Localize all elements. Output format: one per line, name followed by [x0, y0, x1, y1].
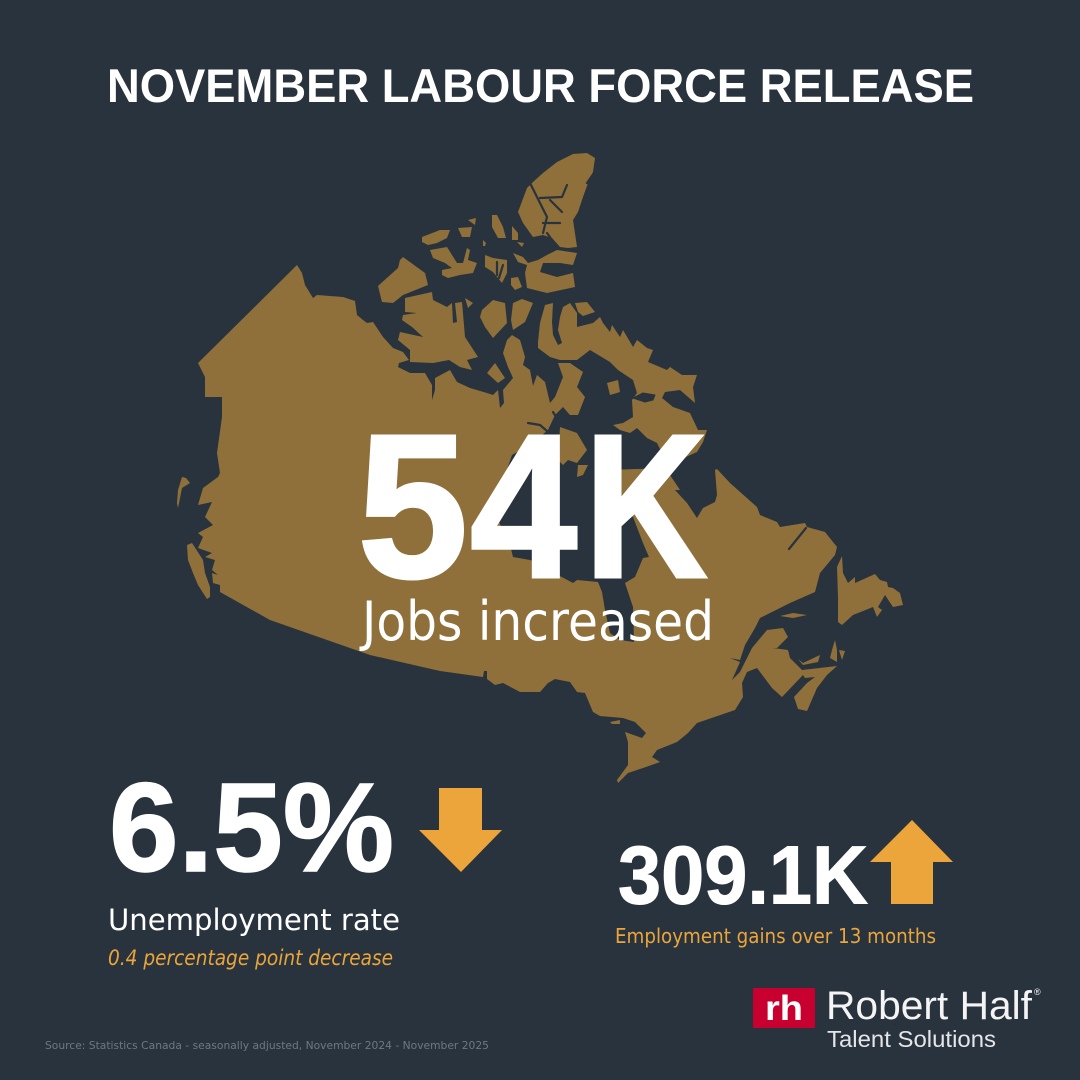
Devon Island — [513, 250, 577, 293]
big number: jobs increased: K — [584, 391, 707, 621]
Anticosti and Maritime islands — [605, 451, 845, 724]
water details — [497, 173, 806, 549]
Southampton Island — [558, 427, 587, 465]
logo registered mark: ® — [1034, 987, 1041, 997]
mainland — [198, 265, 837, 783]
stat: unemployment rate — [108, 757, 502, 971]
label: employment gains: Employment gains over 13 months — [615, 924, 936, 948]
logo rh letters: rh — [765, 989, 803, 1028]
Coats Island — [577, 465, 588, 477]
big number: jobs increased: 5 — [358, 391, 468, 621]
Baffin Island — [538, 303, 707, 465]
big number: jobs increased — [358, 391, 707, 621]
logo red box — [753, 988, 815, 1028]
stat: employment gains — [615, 820, 953, 948]
label: unemployment rate: Unemployment rate — [108, 903, 400, 937]
Haida Gwaii — [177, 477, 190, 508]
Vancouver Island — [187, 543, 210, 599]
number: 6.5%: 6.5% — [109, 757, 394, 898]
big number: jobs increased: 4 — [470, 393, 577, 621]
logo tagline: Talent Solutions — [827, 1026, 996, 1052]
Ellesmere Island — [518, 153, 595, 248]
small central arctic islands — [465, 298, 533, 383]
Newfoundland — [837, 556, 903, 625]
source note: Source: Statistics Canada - seasonally adjusted, November 2024 - November 2025 — [45, 1039, 489, 1052]
title: NOVEMBER LABOUR FORCE RELEASE — [107, 59, 974, 112]
Prince Charles Island — [607, 380, 620, 395]
Banks Island — [378, 257, 428, 303]
number: 309.1K: 309.1K — [618, 828, 868, 922]
Victoria Island — [398, 292, 478, 370]
note: percentage point decrease: 0.4 percentage point decrease — [108, 946, 393, 971]
map of Canada — [177, 153, 903, 783]
label: jobs increased: Jobs increased — [359, 590, 714, 653]
logo name: Robert Half — [826, 984, 1033, 1028]
Queen Elizabeth islands — [422, 215, 524, 290]
Bylot Island — [575, 302, 595, 316]
logo: Robert Half Talent Solutions — [753, 984, 1041, 1052]
icon: down arrow — [419, 788, 502, 872]
icon: up arrow — [870, 820, 953, 904]
